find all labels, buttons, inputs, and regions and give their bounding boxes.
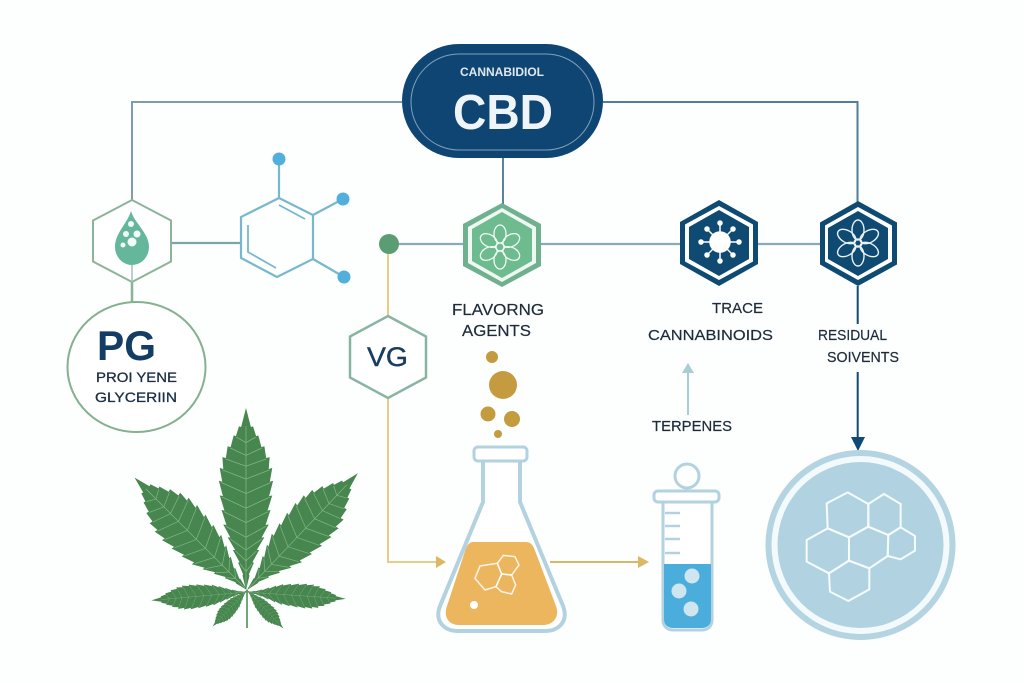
trace cannabinoids label <box>648 300 773 344</box>
VG label: VG <box>367 342 408 372</box>
flavoring agents label <box>452 302 544 340</box>
arrowhead: into test tube <box>638 556 649 568</box>
flask molecule <box>475 555 519 594</box>
PG label line 2: GLYCERIIN <box>95 389 177 405</box>
flavoring agents label: AGENTS <box>462 323 531 340</box>
rising gold bubbles <box>480 351 520 438</box>
trace cannabinoids label: TRACE <box>712 300 763 317</box>
arrowhead: into flask <box>436 556 446 568</box>
flavoring agents label: FLAVORNG <box>452 302 544 319</box>
connector lines <box>132 102 858 562</box>
flask bubble <box>470 601 478 609</box>
icon: residual solvents hexagon <box>820 201 897 286</box>
pill subtitle: CANNABIDIOL <box>460 65 544 79</box>
honeycomb icon <box>807 492 915 601</box>
arrow: terpenes up to cannabinoids <box>682 363 694 415</box>
residual solvents label: SOIVENTS <box>827 349 899 366</box>
trace cannabinoids label: CANNABINOIDS <box>648 327 773 344</box>
icon: benzene molecule <box>241 152 350 284</box>
terpenes label: TERPENES <box>652 418 732 435</box>
cannabis leaf <box>117 408 376 634</box>
residual solvents label <box>818 327 899 366</box>
icon: test tube <box>654 464 719 630</box>
residual solvents label: RESIDUAL <box>818 327 887 344</box>
icon: erlenmeyer flask <box>438 447 565 631</box>
icon: flavoring agents hexagon <box>463 203 541 287</box>
icon: PG droplet hexagon <box>93 200 171 282</box>
icon: trace cannabinoids hexagon <box>680 200 758 286</box>
PG label line 1: PROI YENE <box>96 369 177 385</box>
honeycomb circle <box>766 450 956 640</box>
arrow: residual solvents to honeycomb <box>851 286 865 451</box>
PG circle <box>68 302 206 432</box>
PG heading: PG <box>97 322 156 369</box>
green junction dot <box>379 234 399 254</box>
CBD title pill <box>402 44 603 158</box>
VG hexagon <box>350 316 426 398</box>
pill heading: CBD <box>453 86 553 140</box>
